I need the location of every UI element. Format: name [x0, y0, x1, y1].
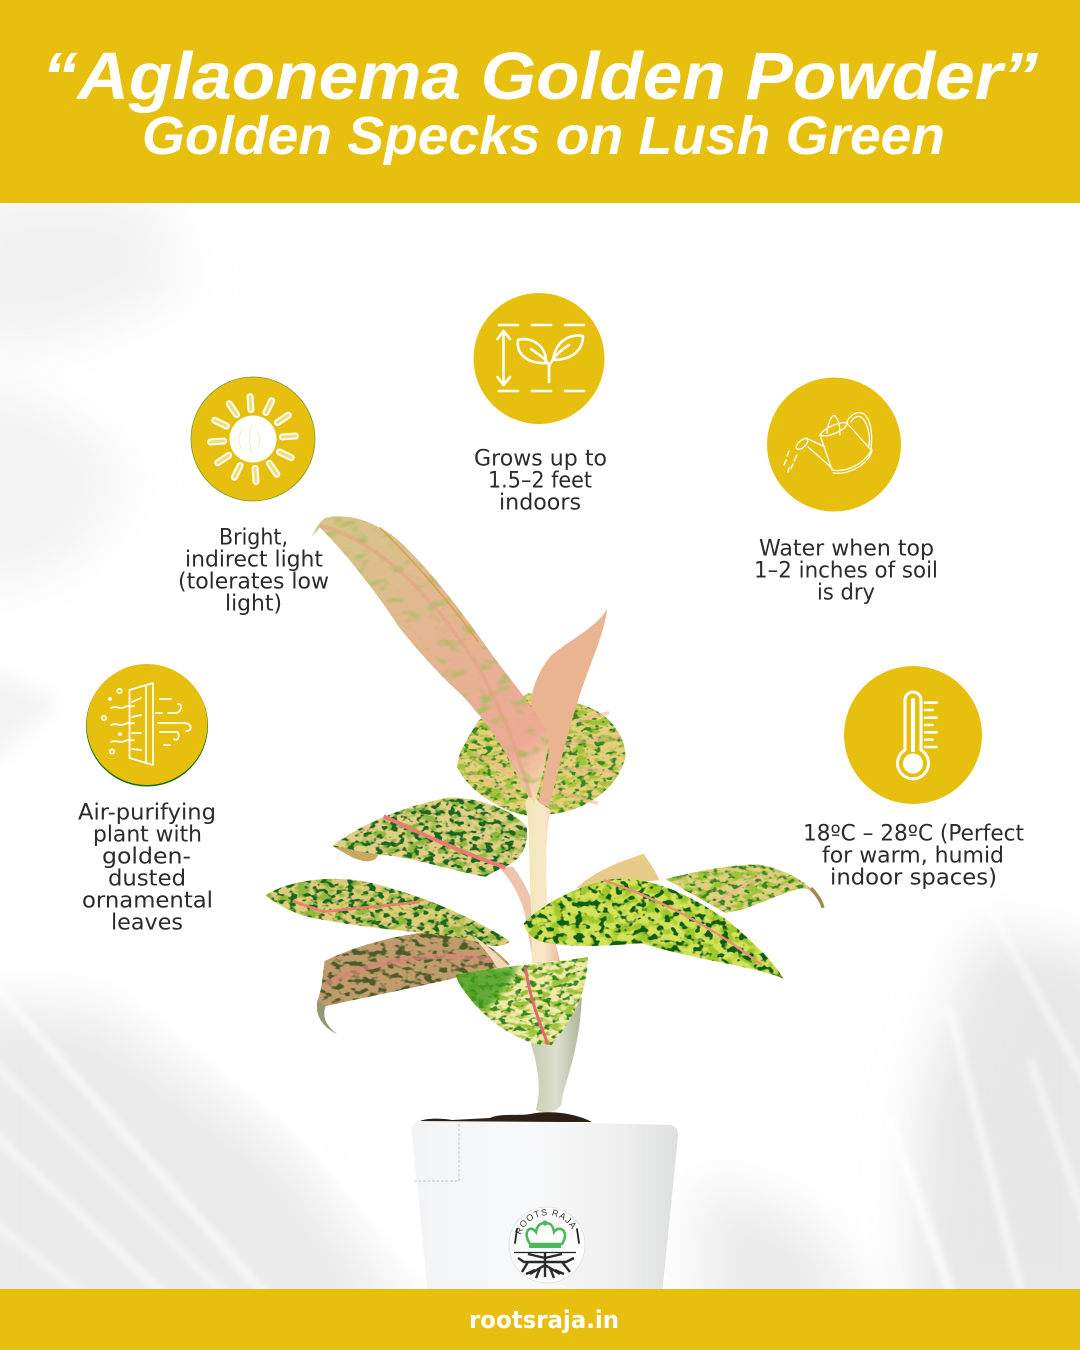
lower left dark leaf	[317, 931, 510, 1034]
text: light	[178, 526, 329, 616]
icon: air filter	[86, 664, 208, 786]
pink petiole	[500, 866, 542, 963]
footer band	[0, 1289, 1080, 1350]
text: temperature: 18ºC – 28ºC (Perfect	[803, 822, 1024, 846]
text: light: Bright,	[219, 526, 288, 550]
soil	[418, 1112, 592, 1122]
text: air purifying: golden-	[102, 844, 191, 870]
left leaf	[265, 879, 510, 946]
text: watering	[754, 536, 938, 606]
icon: plant height	[474, 293, 604, 424]
text: height: 1.5–2 feet	[488, 468, 592, 494]
plant photo illustration	[265, 516, 823, 1112]
icon: watering can	[767, 378, 901, 512]
large top leaf	[311, 516, 549, 803]
far right leaf	[665, 864, 823, 913]
text: watering: 1–2 inches of soil	[754, 558, 938, 584]
panel: temperature	[803, 666, 1024, 890]
lower stem	[531, 996, 582, 1112]
text: height	[474, 446, 607, 516]
panel: height	[474, 293, 607, 516]
text: air purifying: plant with	[93, 822, 202, 848]
panel: air purifying	[78, 664, 216, 936]
text: air purifying: Air-purifying	[78, 800, 216, 826]
icon: sun	[191, 377, 315, 501]
subtitle: Golden Specks on Lush Green	[142, 106, 945, 166]
footer website: rootsraja.in	[469, 1306, 619, 1334]
panel: light requirement	[178, 377, 329, 616]
front bottom leaf	[456, 957, 588, 1046]
back leaf right	[457, 693, 625, 815]
upright pink leaf	[531, 608, 607, 807]
text: temperature	[803, 822, 1024, 890]
front right leaf	[524, 879, 784, 979]
mid left leaf	[333, 797, 527, 877]
sticker logo: ROOTS RAJA	[515, 1209, 576, 1234]
front leaf green patch	[449, 965, 518, 1010]
text: watering: is dry	[817, 580, 875, 606]
text: air purifying: leaves	[111, 910, 183, 936]
text: light: light)	[225, 592, 282, 616]
back right small leaf	[576, 854, 659, 888]
text: watering: Water when top	[759, 536, 934, 562]
text: temperature: for warm, humid	[822, 844, 1004, 868]
pot	[412, 1121, 678, 1289]
title: “Aglaonema Golden Powder”	[42, 39, 1039, 114]
panel: watering	[754, 378, 938, 606]
icon: thermometer	[844, 666, 982, 804]
text: light: indirect light	[185, 548, 323, 572]
text: height: Grows up to	[474, 446, 607, 472]
sticker logo	[508, 1206, 586, 1284]
text: light: (tolerates low	[178, 570, 329, 594]
text: temperature: indoor spaces)	[830, 866, 997, 890]
text: air purifying: ornamental	[82, 888, 213, 914]
main stem	[525, 792, 560, 963]
text: air purifying	[78, 800, 216, 936]
header band	[0, 0, 1080, 203]
text: height: indoors	[499, 490, 581, 516]
text: air purifying: dusted	[108, 866, 186, 892]
